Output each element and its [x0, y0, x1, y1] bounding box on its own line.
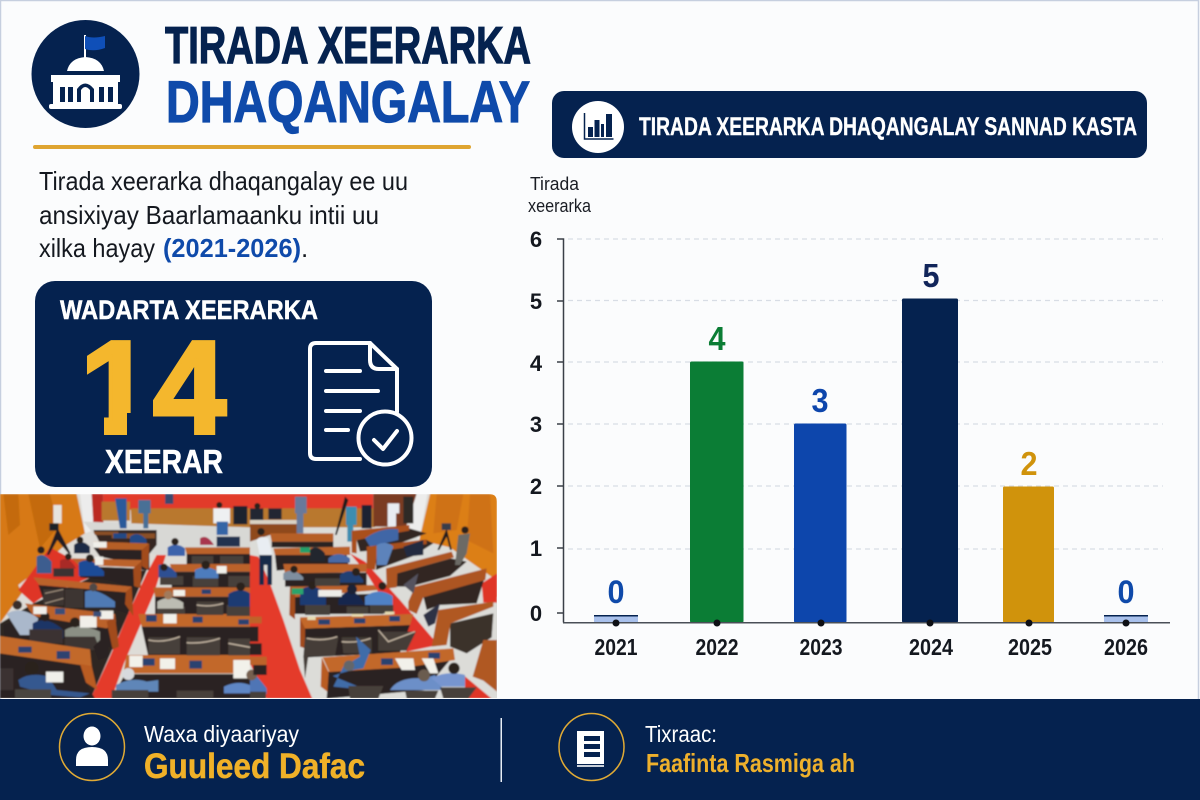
y axis: 3: [530, 412, 542, 437]
x axis years: 2023: [800, 634, 842, 660]
chart header bar: [552, 91, 1147, 158]
panel heading: WADARTA XEERARKA: [60, 295, 318, 325]
bar 2023: [794, 382, 846, 622]
x axis years: 2024: [909, 634, 953, 660]
total number: 14: [80, 314, 226, 461]
standing figure: [257, 528, 273, 585]
icon: document with check: [310, 343, 412, 464]
bar chart: [530, 227, 1170, 660]
panel: total laws: [35, 281, 432, 487]
x axis years: 2026: [1104, 634, 1148, 660]
bar 2023: 3: [812, 382, 828, 419]
left desk row 4: [78, 566, 135, 580]
y axis: 1: [530, 536, 542, 561]
axis title: xeerarka: [528, 196, 592, 216]
y axis: 2: [530, 474, 542, 499]
y axis: 5: [530, 289, 542, 314]
photo: right half of chamber: [246, 494, 500, 699]
x axis years: [594, 634, 1148, 660]
icon: parliament building emblem: [32, 20, 140, 128]
bar 2025: [1003, 445, 1054, 622]
left desk row 1: [0, 694, 96, 698]
bar 2026: 0: [1118, 574, 1134, 610]
y axis: [530, 227, 564, 626]
aisle and side carpet: [250, 555, 312, 699]
left desk row 3: [38, 585, 128, 614]
title: DHAQANGALAY: [166, 70, 530, 135]
intro text: [39, 166, 408, 263]
title: [165, 17, 531, 135]
bar 2025: 2: [1020, 445, 1038, 482]
footer band: [0, 699, 1200, 800]
y axis: 6: [530, 227, 542, 252]
author name: Guuleed Dafac: [144, 747, 365, 786]
source label: Tixraac:: [645, 721, 717, 747]
right desk rows: [272, 542, 333, 547]
source value: Faafinta Rasmiga ah: [646, 748, 855, 778]
y axis: 4: [530, 351, 543, 376]
centre desks: [187, 553, 250, 565]
x axis years: 2022: [696, 634, 738, 660]
icon: bar chart: [572, 101, 624, 153]
intro text: ansixiyay Baarlamaanku intii uu: [39, 200, 379, 230]
photo: left half of chamber: [0, 494, 250, 699]
unit label: XEERAR: [105, 443, 223, 480]
left desk row 5: [93, 543, 149, 570]
title: TIRADA XEERARKA: [165, 17, 531, 75]
bar 2022: 4: [708, 320, 726, 357]
axis title: [528, 174, 592, 216]
intro text: (2021-2026): [163, 233, 301, 263]
axis title: Tirada: [530, 174, 580, 194]
intro text: Tirada xeerarka dhaqangalay ee uu: [39, 166, 408, 196]
author label: Waxa diyaariyay: [144, 721, 299, 747]
x axis years: 2021: [594, 634, 638, 660]
intro text: .: [301, 233, 308, 263]
left desk row 2: [3, 615, 118, 649]
bar 2024: [902, 257, 958, 622]
far right rows: [357, 528, 427, 552]
y axis: 0: [530, 601, 542, 626]
icon: book source: [559, 714, 624, 780]
bar 2021: [594, 574, 638, 623]
photo: parliament chamber: [0, 494, 500, 699]
bar 2024: 5: [922, 257, 940, 294]
icon: author: [60, 714, 124, 780]
bar 2021: 0: [608, 574, 624, 610]
bar 2026: [1104, 574, 1148, 623]
bar 2022: [690, 320, 744, 622]
x axis years: 2025: [1008, 634, 1052, 660]
intro text: xilka hayay: [39, 233, 155, 263]
